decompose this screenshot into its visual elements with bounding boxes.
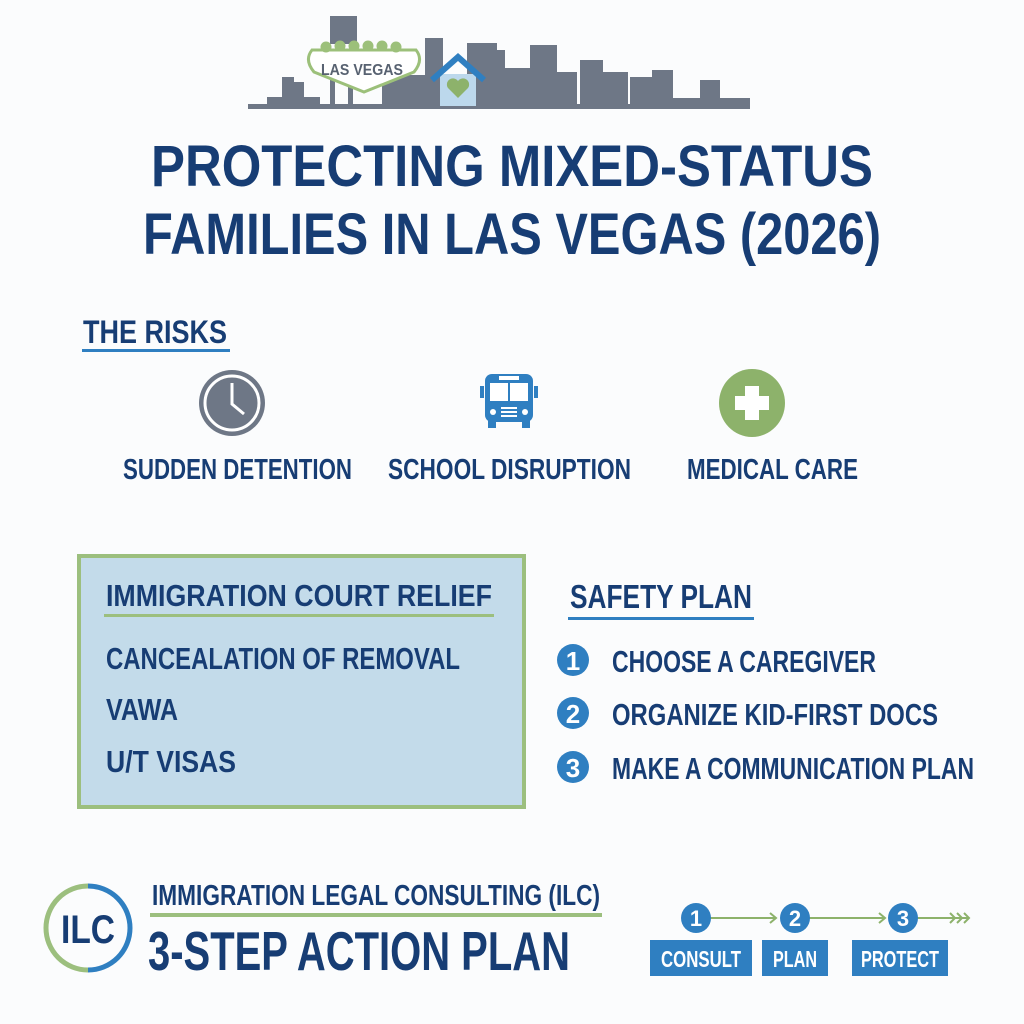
step 3: 3 [566,753,580,783]
action plan steps diagram: PROTECT [861,946,939,972]
company name and plan heading [148,880,602,982]
step 1: CHOOSE A CAREGIVER [612,644,876,679]
icon: medical cross [719,369,785,437]
house icon with heart [432,57,484,106]
step 2: ORGANIZE KID-FIRST DOCS [612,697,938,732]
risk labels: SUDDEN DETENTION [123,454,352,486]
buildings [248,16,750,109]
company name and plan heading: IMMIGRATION LEGAL CONSULTING (ILC) [152,880,600,912]
icon: ILC logo [46,886,130,970]
relief list: CANCEALATION OF REMOVAL [106,641,460,676]
step 1: 1 [566,646,580,676]
title: FAMILIES IN LAS VEGAS (2026) [143,202,881,267]
risk labels: SCHOOL DISRUPTION [388,454,631,486]
las vegas sign: LAS VEGAS [321,62,403,79]
relief list [106,641,460,779]
action plan steps diagram: 2 [789,906,801,931]
action plan steps diagram: CONSULT [661,946,741,972]
panel: safety plan: SAFETY PLAN [570,578,752,615]
relief list: VAWA [106,692,178,727]
panel: safety plan [557,578,974,786]
heading: the risks: THE RISKS [83,314,227,350]
action plan steps diagram: PLAN [773,946,817,972]
action plan steps diagram [650,903,969,976]
relief list: U/T VISAS [106,744,236,779]
step 2: 2 [566,699,580,729]
arrows [710,913,969,923]
icon: ILC logo: ILC [61,908,115,952]
action plan steps diagram: 1 [690,906,702,931]
step 1 [557,644,876,679]
icon: school bus [480,374,538,428]
panel heading: IMMIGRATION COURT RELIEF [106,578,492,613]
icon: clock [199,370,265,436]
action plan steps diagram: 3 [897,906,909,931]
title: PROTECTING MIXED-STATUS [151,134,873,199]
las vegas sign [308,40,420,92]
company name and plan heading: 3-STEP ACTION PLAN [148,920,570,982]
title [143,134,881,267]
skyline illustration [248,16,750,109]
step 2 [557,697,938,732]
step boxes [650,940,752,976]
risk labels: MEDICAL CARE [687,454,858,486]
risk labels [123,454,858,486]
panel: immigration court relief [79,556,524,807]
